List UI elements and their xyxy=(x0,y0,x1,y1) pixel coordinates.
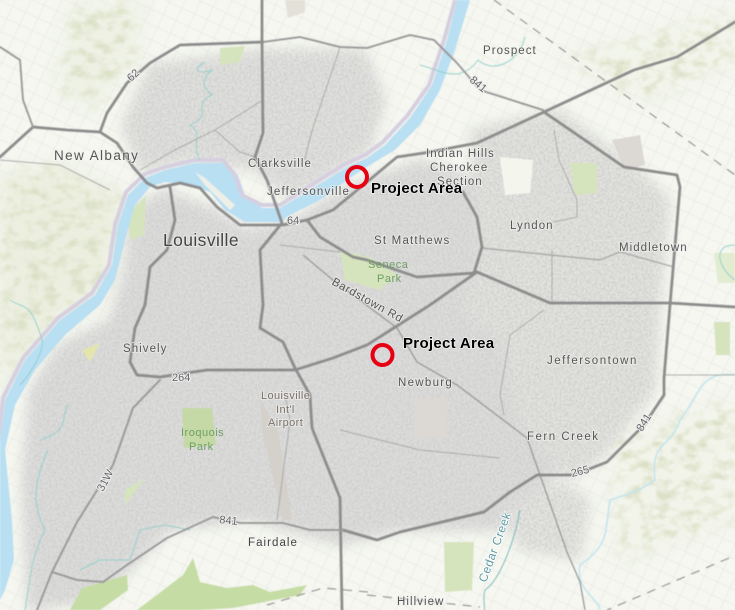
I-264 west and south xyxy=(130,187,477,377)
place labels xyxy=(54,45,688,608)
label: Iroquois Park: Park xyxy=(189,441,214,453)
Ohio River xyxy=(0,0,470,600)
label: Lyndon: Lyndon xyxy=(510,220,554,232)
label: New Albany: New Albany xyxy=(54,148,139,163)
label: Louisville Int'l Airport: Louisville xyxy=(261,390,310,402)
urban area: Louisville core xyxy=(22,160,560,610)
US-31W xyxy=(37,380,160,610)
label: Hillview: Hillview xyxy=(397,596,444,608)
label: north Project Area: Project Area xyxy=(371,180,463,197)
label: Prospect: Prospect xyxy=(483,45,537,57)
label: Iroquois Park: Iroquois xyxy=(181,427,224,439)
label: Louisville Int'l Airport: Int'l xyxy=(276,404,295,416)
urban area: Indiana side xyxy=(122,50,385,200)
label: Indian Hills Cherokee Section: Cherokee xyxy=(430,162,488,174)
shield: 841 south: 841 xyxy=(219,514,238,528)
label: south Project Area: Project Area xyxy=(403,335,495,352)
label: St Matthews: St Matthews xyxy=(374,235,450,247)
label: Indian Hills Cherokee Section: Section xyxy=(437,176,483,188)
I-64 east xyxy=(307,192,482,277)
I-71 north-east xyxy=(283,22,735,225)
highway shield numbers xyxy=(95,67,654,528)
shield: 264: 264 xyxy=(172,372,190,384)
label: Fairdale: Fairdale xyxy=(248,537,298,549)
state boundary in river xyxy=(0,0,455,440)
label: Bardstown Rd: Bardstown Rd xyxy=(330,276,405,325)
north-west connector xyxy=(0,47,33,127)
label: Seneca Park: Park xyxy=(377,273,402,285)
label: Shively: Shively xyxy=(123,343,167,355)
shield: 841 east: 841 xyxy=(634,412,654,434)
label: Middletown: Middletown xyxy=(619,242,688,254)
river islands and harbour xyxy=(195,172,235,210)
urban area: eastern suburbs xyxy=(460,110,670,480)
Gene Snyder north xyxy=(263,35,543,110)
label: Fern Creek: Fern Creek xyxy=(527,431,600,443)
marker: south project area circle xyxy=(372,345,392,365)
I-64 to I-265 east xyxy=(477,272,735,307)
shield: 841 north: 841 xyxy=(467,74,489,95)
label: Cedar Creek: Cedar Creek xyxy=(476,510,514,584)
marker: north project area circle xyxy=(347,167,367,187)
label: Jeffersonville: Jeffersonville xyxy=(267,186,350,198)
I-265 east and south xyxy=(343,112,680,540)
I-64 and I-265 west xyxy=(0,127,283,225)
shield: 64: 64 xyxy=(287,215,299,227)
shield: 31W: 31W xyxy=(95,467,117,493)
urban area: south suburbs xyxy=(500,480,590,560)
label: Louisville: Louisville xyxy=(163,230,239,250)
US-62 xyxy=(100,42,263,132)
dashed boundary lines xyxy=(267,0,735,610)
label: Jeffersontown: Jeffersontown xyxy=(547,355,638,367)
pale open land xyxy=(500,157,533,195)
I-65 xyxy=(255,0,342,610)
shield: 265: 265 xyxy=(570,464,591,480)
label: Clarksville: Clarksville xyxy=(248,158,312,170)
841 south xyxy=(52,517,343,582)
label: Louisville Int'l Airport: Airport xyxy=(268,417,303,429)
label: Seneca Park: Seneca xyxy=(368,259,409,271)
shield: 62: 62 xyxy=(125,67,142,84)
label: Indian Hills Cherokee Section xyxy=(426,148,495,188)
label: Newburg: Newburg xyxy=(398,377,453,389)
label: Indian Hills Cherokee Section: Indian Hills xyxy=(426,148,495,160)
airport and quarry surfaces xyxy=(260,0,645,520)
label: Louisville Int'l Airport xyxy=(261,390,310,429)
